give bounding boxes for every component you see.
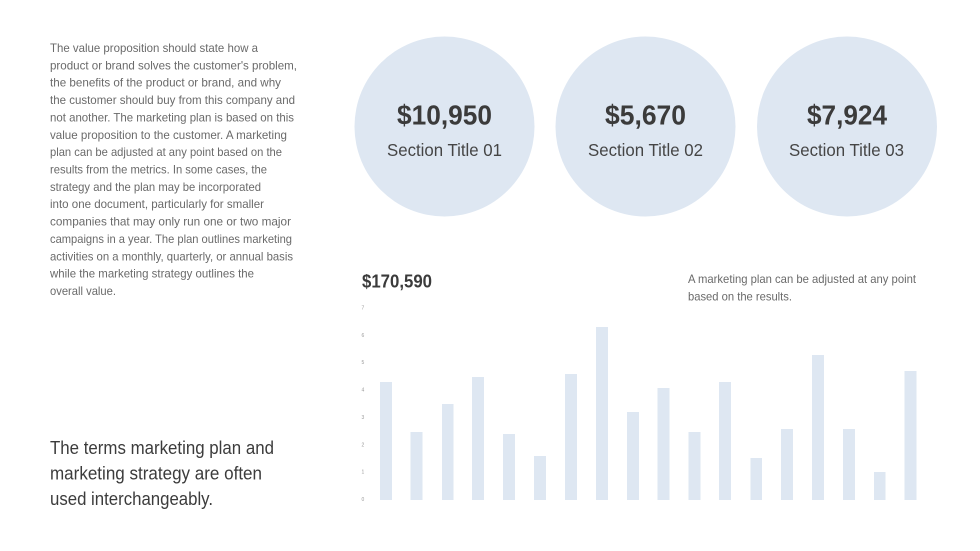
y axis labels xyxy=(362,306,364,503)
stat circle 2: $5,670 xyxy=(605,100,686,130)
y axis labels: 4 xyxy=(362,388,364,394)
stat circle 1: Section Title 01 xyxy=(387,140,502,160)
body text block: companies that may only run one or two major xyxy=(50,215,291,229)
y axis labels: 1 xyxy=(362,470,364,476)
body text block: into one document, particularly for smaller xyxy=(50,197,264,211)
callout statement: used interchangeably. xyxy=(50,489,213,509)
y axis labels: 2 xyxy=(362,442,364,448)
y axis labels: 5 xyxy=(362,360,364,366)
stat circle 2 xyxy=(556,36,736,216)
body text block: value proposition to the customer. A marketing xyxy=(50,128,287,142)
stat circle 1 xyxy=(354,36,534,216)
body text block: campaigns in a year. The plan outlines marketing xyxy=(50,232,292,246)
bar chart xyxy=(362,306,916,503)
body text block: overall value. xyxy=(50,284,116,298)
chart description xyxy=(688,272,917,304)
body text block xyxy=(49,41,297,298)
body text block: the benefits of the product or brand, and why xyxy=(50,76,281,90)
y axis labels: 3 xyxy=(362,415,364,421)
stat circle 3: $7,924 xyxy=(807,100,887,130)
callout statement xyxy=(50,438,274,509)
body text block: The value proposition should state how a xyxy=(50,41,258,55)
body text block: not another. The marketing plan is based on this xyxy=(50,110,294,124)
callout statement: The terms marketing plan and xyxy=(50,438,274,458)
stat circle 3: Section Title 03 xyxy=(789,140,904,160)
body text block: while the marketing strategy outlines the xyxy=(49,267,254,281)
chart description: based on the results. xyxy=(688,290,792,304)
stat circle 3 xyxy=(757,36,937,216)
body text block: plan can be adjusted at any point based on the xyxy=(50,145,282,159)
body text block: activities on a monthly, quarterly, or annual basis xyxy=(50,249,293,263)
callout statement: marketing strategy are often xyxy=(50,464,262,484)
chart description: A marketing plan can be adjusted at any point xyxy=(688,272,917,286)
bars xyxy=(380,327,916,500)
body text block: strategy and the plan may be incorporated xyxy=(50,180,261,194)
y axis labels: 6 xyxy=(362,333,364,339)
body text block: the customer should buy from this company and xyxy=(50,93,295,107)
stat circle 2: Section Title 02 xyxy=(588,140,703,160)
y axis labels: 0 xyxy=(362,497,364,503)
chart total: $170,590 xyxy=(362,272,432,292)
stat circle 1: $10,950 xyxy=(397,100,492,130)
y axis labels: 7 xyxy=(362,306,364,312)
body text block: results from the metrics. In some cases, the xyxy=(50,162,267,176)
body text block: product or brand solves the customer's problem, xyxy=(50,58,297,72)
